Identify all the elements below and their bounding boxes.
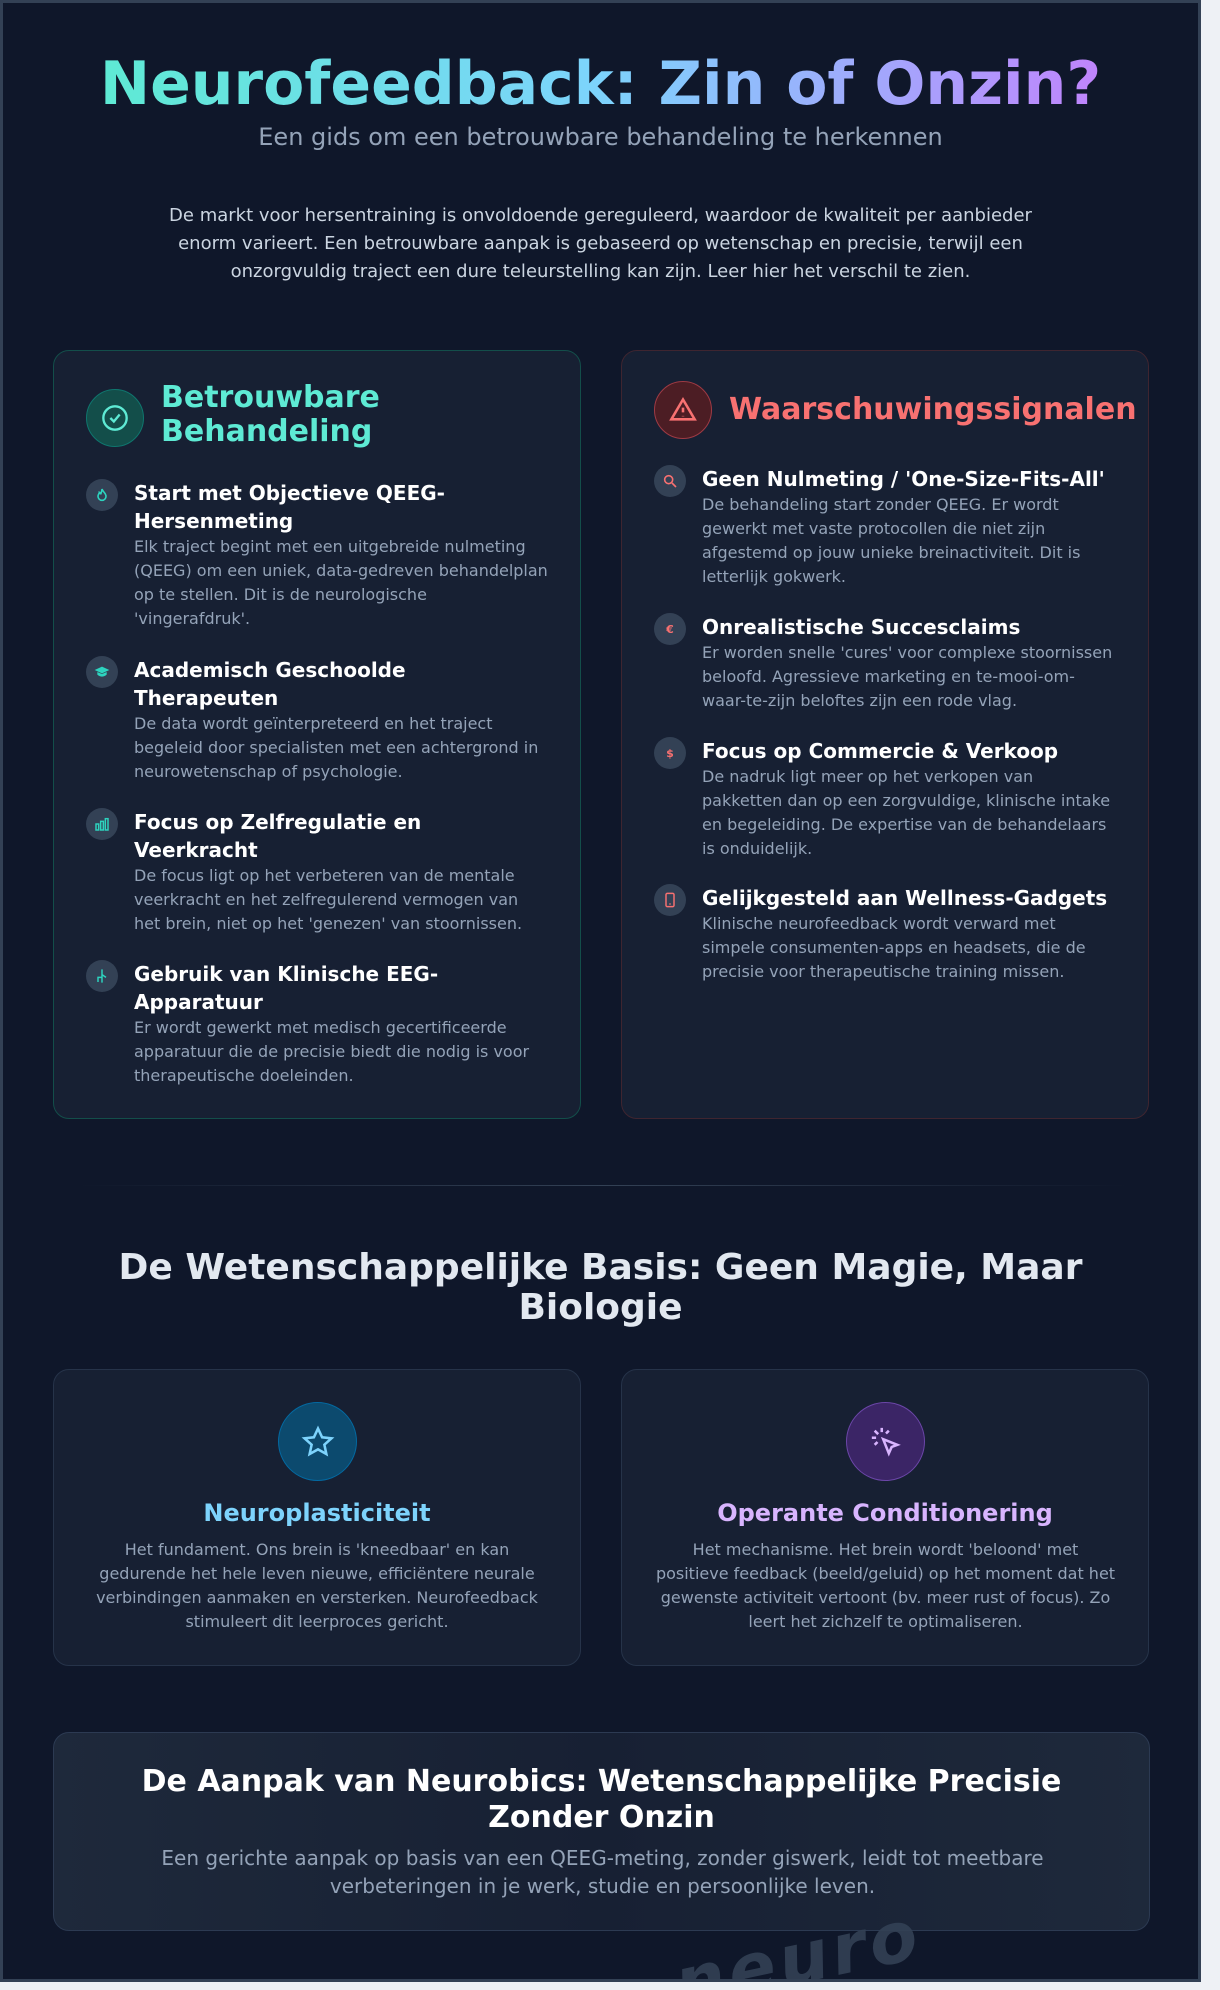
icon: star xyxy=(278,1402,357,1481)
item: geen nulmeting: afgestemd op jouw unieke breinactiviteit. Dit is xyxy=(702,543,1080,562)
panel: betrouwbare behandeling xyxy=(53,350,581,1119)
heading xyxy=(161,380,380,449)
title: Neurofeedback: Zin of Onzin? xyxy=(100,49,1101,119)
icon: warning triangle xyxy=(654,381,712,439)
card: neuroplasticiteit: Het fundament. Ons brein is 'kneedbaar' en kan gedurende het hele leven nieuwe, efficiëntere neurale verbindingen aanmaken en versterken. Neurofeedback stimuleert dit leerproces gericht. xyxy=(96,1540,538,1631)
item: succesclaims xyxy=(654,613,1112,710)
item: geen nulmeting: letterlijk gokwerk. xyxy=(702,567,846,586)
final callout xyxy=(53,1732,1150,1931)
item: succesclaims: Onrealistische Succesclaims xyxy=(702,615,1020,639)
card: operante conditionering xyxy=(621,1369,1149,1666)
heading: Behandeling xyxy=(161,414,372,449)
card: operante conditionering: Het mechanisme. Het brein wordt 'beloond' met positieve feedback (beeld/geluid) op het moment dat het gewenste activiteit vertoont (bv. meer rust of focus). Zo leert het zichzelf te optimaliseren. xyxy=(656,1540,1115,1631)
card: neuroplasticiteit xyxy=(53,1369,581,1666)
item: apparatuur: therapeutische doeleinden. xyxy=(134,1066,354,1085)
item: apparatuur: apparatuur die de precisie biedt die nodig is voor xyxy=(134,1042,529,1061)
callout heading xyxy=(142,1764,1061,1835)
item: QEEG: (QEEG) om een uniek, data-gedreven behandelplan xyxy=(134,561,548,580)
subtitle: Een gids om een betrouwbare behandeling te herkennen xyxy=(258,123,943,151)
icon: dollar xyxy=(654,737,686,769)
card: operante conditionering: Operante Conditionering xyxy=(717,1499,1053,1527)
item: therapeuten: neurowetenschap of psychologie. xyxy=(134,762,403,781)
icon: fire xyxy=(86,479,118,511)
panel: waarschuwingssignalen xyxy=(621,350,1149,1119)
card: neuroplasticiteit: Neuroplasticiteit xyxy=(203,1499,431,1527)
icon: search xyxy=(654,465,686,497)
item: QEEG: Elk traject begint met een uitgebreide nulmeting xyxy=(134,537,526,556)
item: commercie: Focus op Commercie & Verkoop xyxy=(702,739,1058,763)
icon: bar chart xyxy=(86,808,118,840)
icon: phone xyxy=(654,884,686,916)
item: zelfregulatie xyxy=(86,808,522,933)
item: geen nulmeting: De behandeling start zonder QEEG. Er wordt xyxy=(702,495,1059,514)
item: therapeuten: Academisch Geschoolde Therapeuten xyxy=(134,658,406,710)
intro paragraph: De markt voor hersentraining is onvoldoende gereguleerd, waardoor de kwaliteit per aanbieder enorm varieert. Een betrouwbare aanpak is gebaseerd op wetenschap en precisie, terwijl een onzorgvuldig traject een dure teleurstelling kan zijn. Leer hier het verschil te zien. xyxy=(169,205,1032,282)
item: therapeuten: begeleid door specialisten met een achtergrond in xyxy=(134,738,538,757)
callout heading: De Aanpak van Neurobics: Wetenschappelijke Precisie xyxy=(142,1764,1061,1799)
icon: cursor click xyxy=(846,1402,925,1481)
item: therapeuten xyxy=(86,656,538,781)
item: QEEG xyxy=(86,479,548,628)
item: gadgets: precisie voor therapeutische training missen. xyxy=(702,962,1064,981)
icon: euro xyxy=(654,613,686,645)
item: apparatuur: Gebruik van Klinische EEG-Apparatuur xyxy=(134,962,438,1014)
icon: dollar: $ xyxy=(666,746,674,760)
item: QEEG: op te stellen. Dit is de neurologische xyxy=(134,585,427,604)
item: commercie: pakketten dan op een zorgvuldige, klinische intake xyxy=(702,791,1110,810)
item: apparatuur xyxy=(86,960,530,1085)
item: geen nulmeting xyxy=(654,465,1105,586)
callout text: Een gerichte aanpak op basis van een QEEG-meting, zonder giswerk, leidt tot meetbare verbeteringen in je werk, studie en persoonlijke leven. xyxy=(161,1846,1044,1898)
icon: euro: € xyxy=(666,622,674,636)
item: geen nulmeting: gewerkt met vaste protocollen die niet zijn xyxy=(702,519,1045,538)
callout heading: Zonder Onzin xyxy=(488,1800,715,1835)
item: zelfregulatie: De focus ligt op het verbeteren van de mentale xyxy=(134,866,515,885)
item: geen nulmeting: Geen Nulmeting / 'One-Size-Fits-All' xyxy=(702,467,1105,491)
item: QEEG: Start met Objectieve QEEG-Hersenmeting xyxy=(134,481,445,533)
item: succesclaims: waar-te-zijn beloftes zijn een rode vlag. xyxy=(702,691,1017,710)
icon: check circle xyxy=(86,389,144,447)
item: zelfregulatie: veerkracht en het zelfregulerend vermogen van xyxy=(134,890,518,909)
section heading xyxy=(119,1247,1082,1328)
item: therapeuten: De data wordt geïnterpreteerd en het traject xyxy=(134,714,492,733)
item: succesclaims: Er worden snelle 'cures' voor complexe stoornissen xyxy=(702,643,1112,662)
item: gadgets: simpele consumenten-apps en headsets, die de xyxy=(702,938,1086,957)
section heading: Biologie xyxy=(518,1287,683,1328)
item: zelfregulatie: het brein, niet op het 'genezen' van stoornissen. xyxy=(134,914,522,933)
item: zelfregulatie: Focus op Zelfregulatie en Veerkracht xyxy=(134,810,421,862)
item: commercie: De nadruk ligt meer op het verkopen van xyxy=(702,767,1033,786)
item: gadgets xyxy=(654,884,1107,981)
heading: Betrouwbare xyxy=(161,380,380,415)
item: QEEG: 'vingerafdruk'. xyxy=(134,609,250,628)
item: succesclaims: beloofd. Agressieve marketing en te-mooi-om- xyxy=(702,667,1075,686)
item: gadgets: Gelijkgesteld aan Wellness-Gadgets xyxy=(702,886,1107,910)
heading: Waarschuwingssignalen xyxy=(729,392,1137,427)
icon: graduation cap xyxy=(86,656,118,688)
icon: device xyxy=(86,960,118,992)
section heading: De Wetenschappelijke Basis: Geen Magie, Maar xyxy=(119,1247,1082,1288)
item: commercie xyxy=(654,737,1110,858)
item: gadgets: Klinische neurofeedback wordt verward met xyxy=(702,914,1056,933)
item: commercie: en begeleiding. De expertise van de behandelaars xyxy=(702,815,1106,834)
item: commercie: is onduidelijk. xyxy=(702,839,812,858)
item: apparatuur: Er wordt gewerkt met medisch gecertificeerde xyxy=(134,1018,507,1037)
